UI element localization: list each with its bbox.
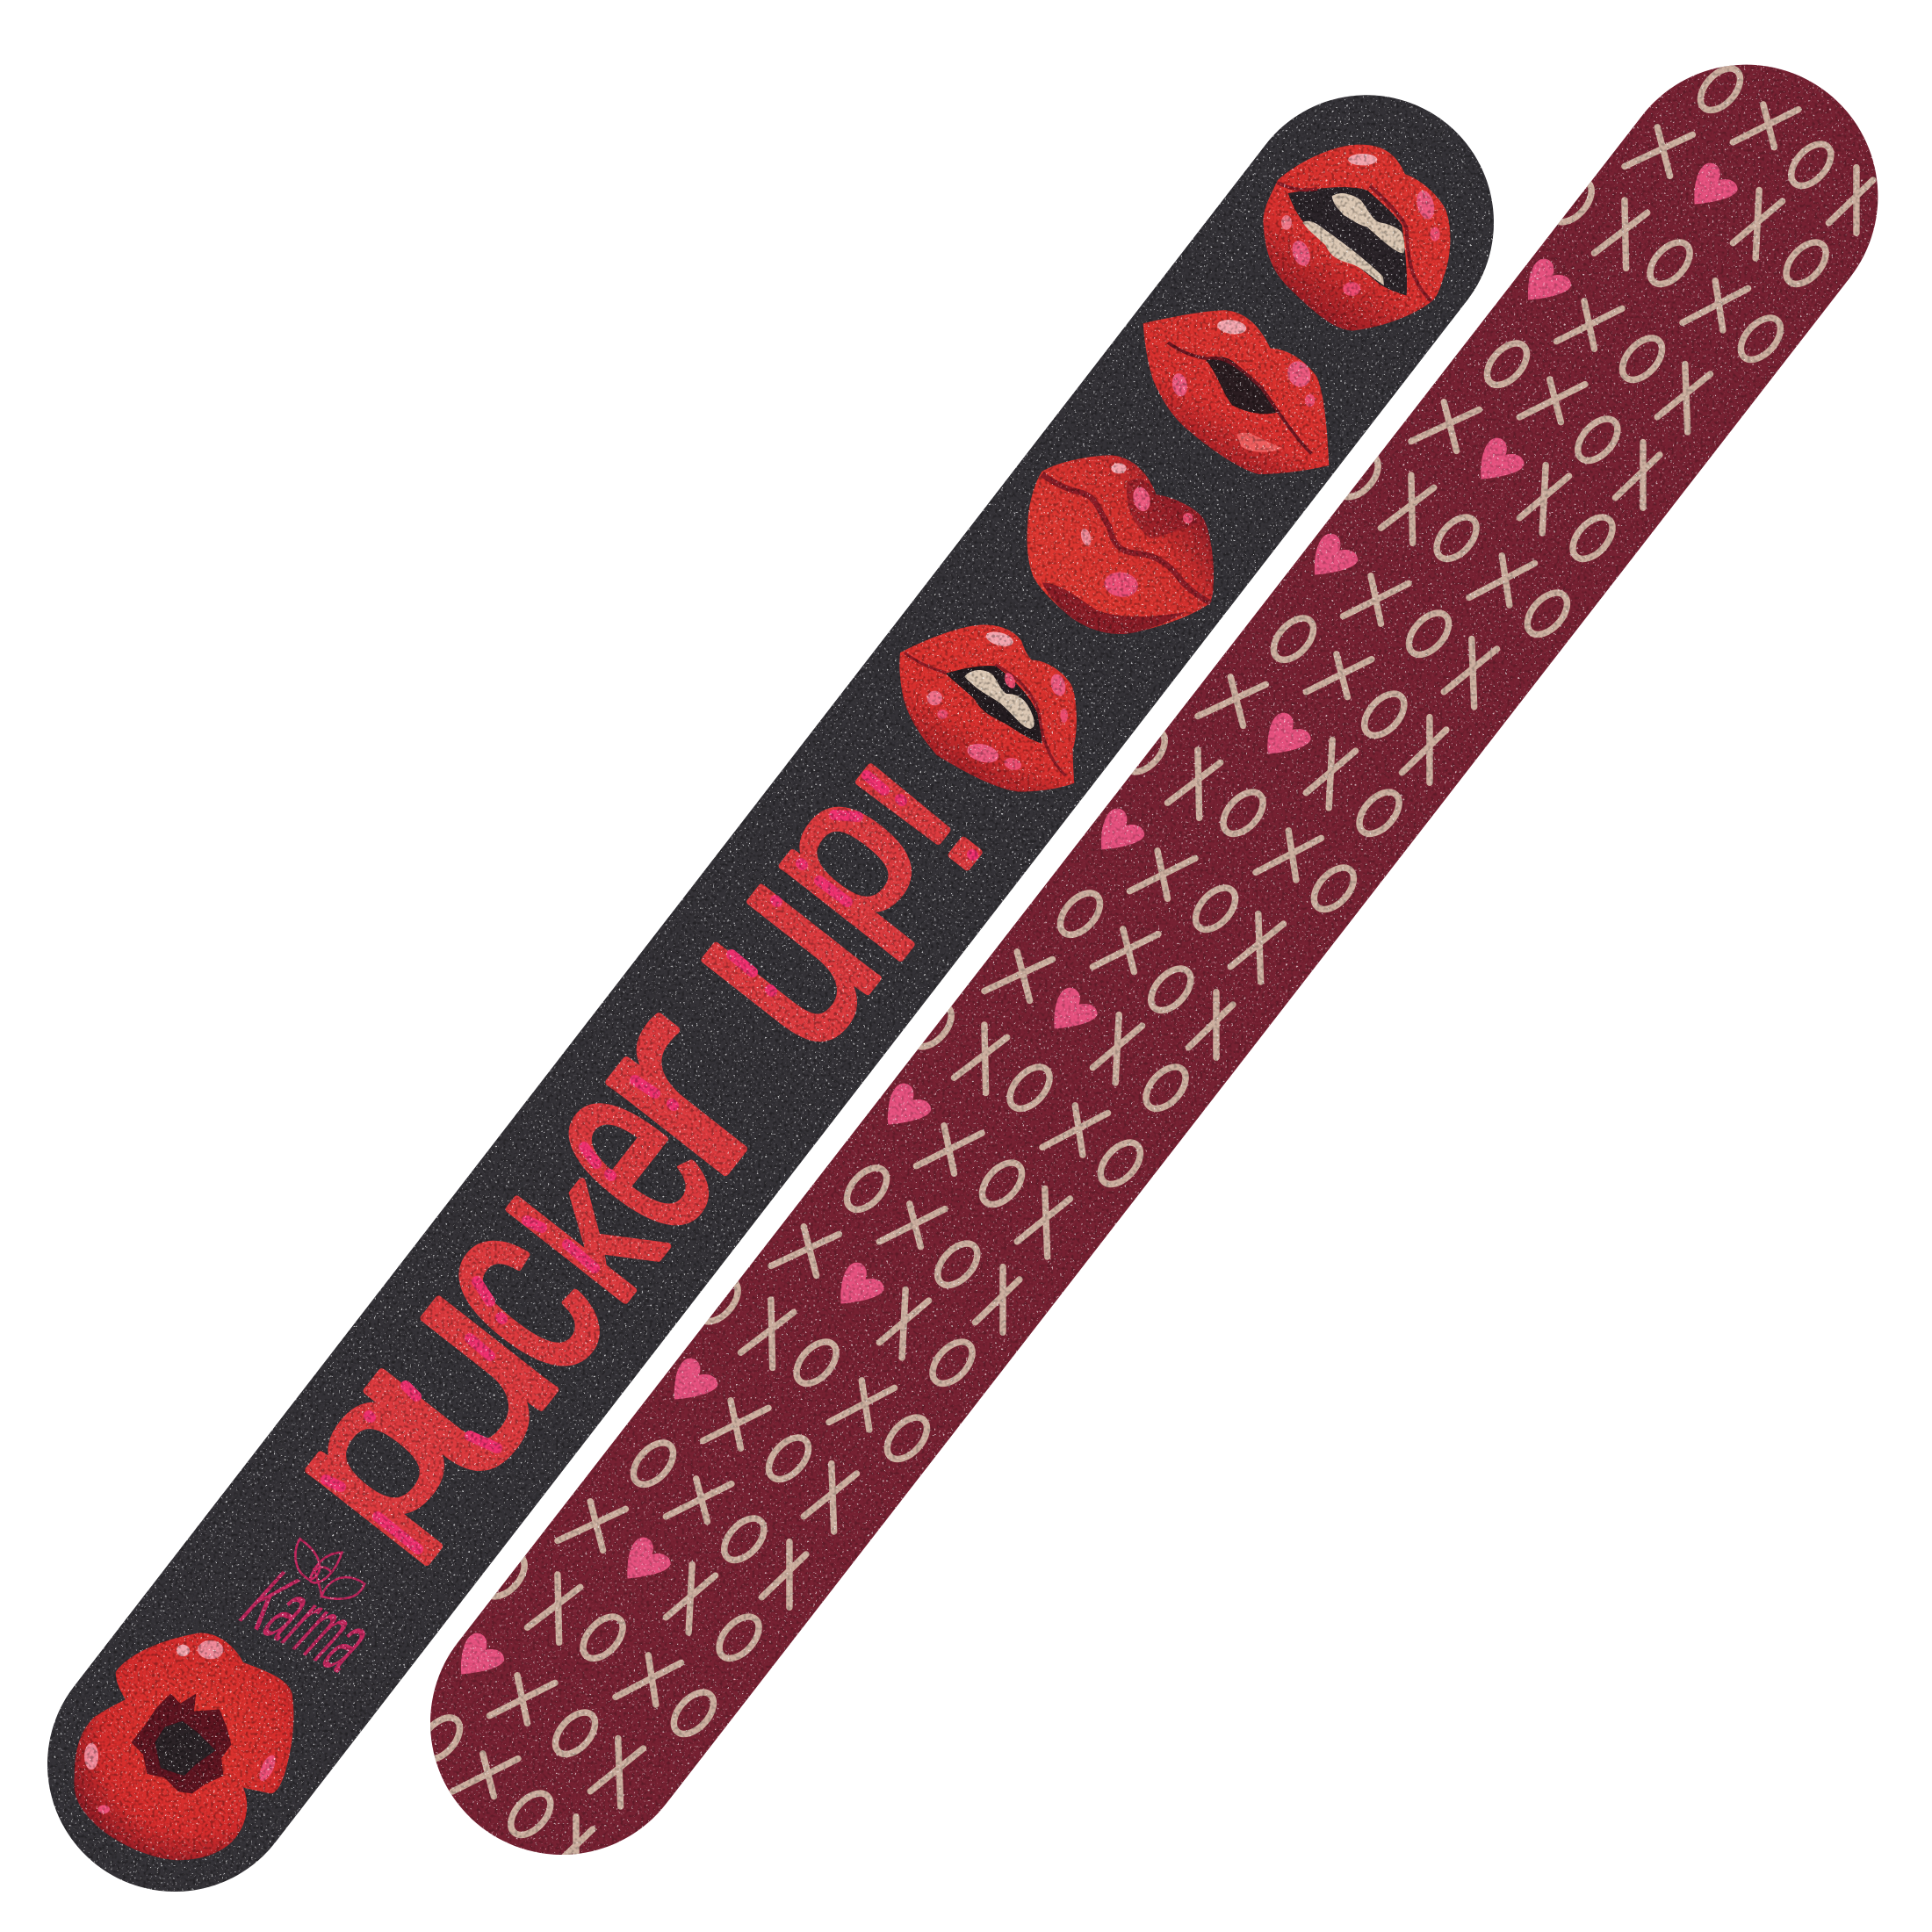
slogan: pucker up!: r: [514, 948, 826, 1227]
lips: pursed second: [1143, 310, 1329, 474]
slogan: pucker up!: u: [613, 811, 934, 1099]
pink highlights on slogan: [326, 775, 973, 1549]
panel: black Pucker Up nail file: [40, 83, 1506, 1901]
lips: open mouth top: [1263, 145, 1450, 331]
slogan: pucker up!: !: [814, 726, 1024, 908]
slogan: pucker up!: u: [273, 1220, 614, 1533]
slogan: pucker up!: c: [358, 1159, 660, 1424]
Karma logo: [238, 1537, 366, 1673]
lips: kiss third: [1027, 455, 1214, 634]
lips: puckered bottom: [74, 1633, 293, 1860]
slogan: pucker up!: p: [240, 1336, 496, 1575]
glitter texture on burgundy file: [422, 53, 1888, 1862]
glitter texture on black file: [40, 83, 1506, 1901]
slogan: pucker up!: e: [470, 1020, 771, 1282]
slogan: pucker up!: k: [473, 1132, 703, 1337]
lotus icon: [295, 1539, 364, 1599]
slogan: pucker up!: p: [715, 742, 962, 970]
brand name: Karma: [221, 1554, 395, 1688]
lips: open mouth fourth: [899, 624, 1077, 792]
